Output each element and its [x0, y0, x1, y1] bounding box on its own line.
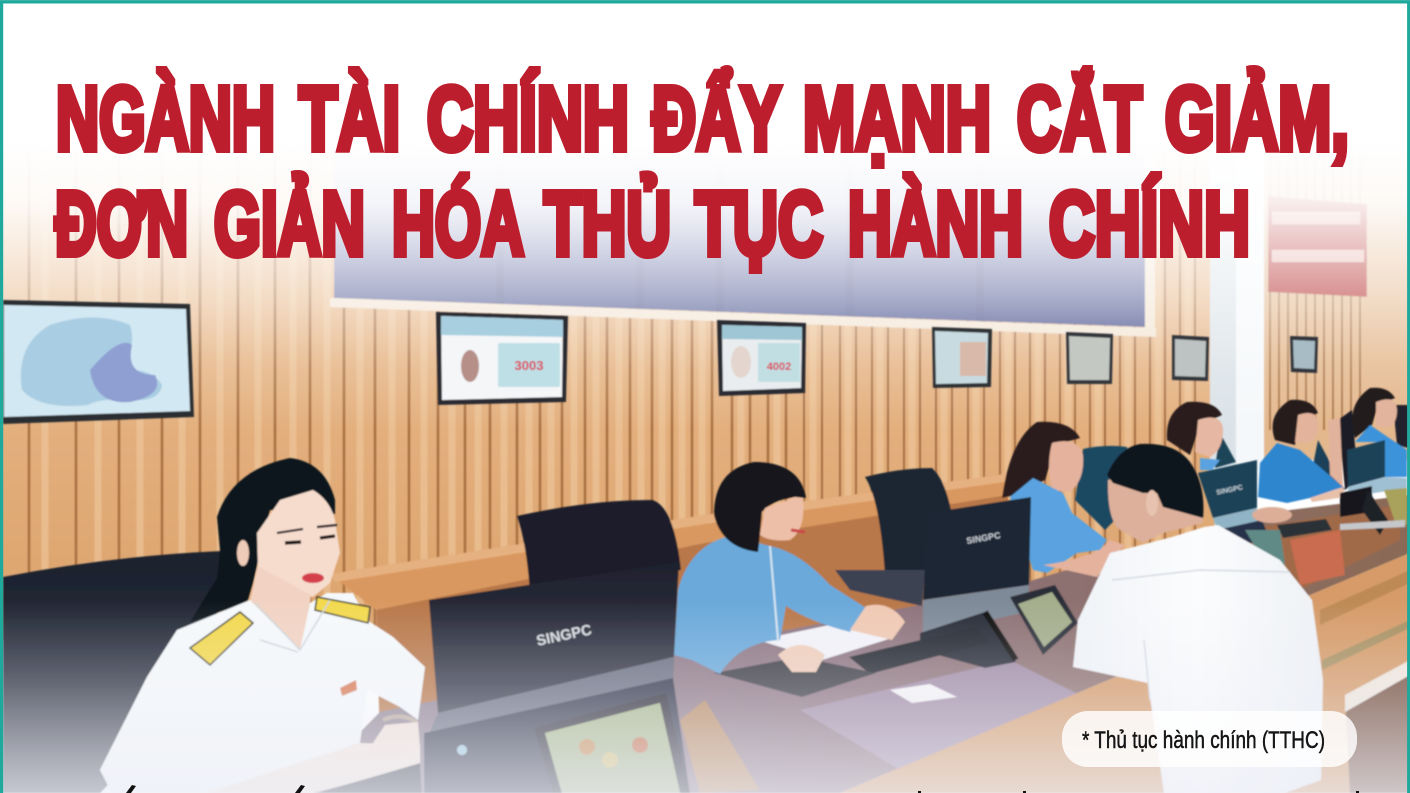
title: TỤC	[695, 174, 823, 274]
title: MẠNH	[803, 70, 991, 170]
wall monitor 5	[1172, 335, 1209, 381]
title: TÀI	[299, 68, 400, 170]
monitor centre: SINGPC	[966, 530, 1002, 546]
title	[55, 68, 1349, 274]
monitor teal: SINGPC	[1216, 484, 1244, 497]
tablet centre	[1010, 585, 1078, 655]
chair back 3	[835, 468, 951, 606]
desk wooden front	[840, 553, 1410, 793]
chair back 2	[517, 500, 681, 592]
title: ĐƠN	[55, 174, 188, 274]
wall monitor 3	[932, 327, 992, 388]
glass desk surface	[300, 495, 1410, 793]
woman 3 blue shirt	[1002, 422, 1125, 577]
right wall section	[1263, 120, 1410, 460]
top white fade	[0, 0, 1410, 430]
wall monitor 4	[1066, 332, 1113, 384]
wall monitor 2: 4002	[767, 361, 791, 373]
wall monitor 1	[436, 312, 568, 405]
monitor SINGPC: SINGPC	[535, 621, 593, 650]
keyboard far	[1277, 519, 1332, 538]
red sign	[1268, 196, 1367, 297]
chair back 4	[1075, 446, 1135, 530]
man in white shirt	[1073, 444, 1323, 793]
wall TV left	[3, 300, 194, 424]
title: CHÍNH	[427, 68, 629, 170]
visitor chair right	[1345, 660, 1410, 793]
papers	[758, 619, 957, 703]
title: GIẢN	[214, 172, 365, 274]
woman 2 blue shirt	[674, 462, 905, 674]
wall monitor 1: 3003	[515, 358, 543, 373]
far chairs	[1215, 405, 1408, 490]
wood wall	[0, 120, 1215, 640]
title: NGÀNH	[56, 68, 275, 170]
white pillar	[1210, 150, 1264, 470]
title: THỦ	[544, 172, 671, 274]
monitor far right	[1340, 440, 1407, 535]
cut-off next-line accents	[126, 785, 1359, 793]
title: HÓA	[392, 174, 524, 274]
keyboards	[714, 627, 990, 697]
monitor teal	[1198, 460, 1285, 565]
woman 1 in uniform	[100, 458, 425, 793]
wall monitor 6	[1290, 336, 1318, 373]
bottom pale fade	[0, 600, 1410, 793]
tablet left	[534, 693, 690, 793]
photo background: walls	[0, 120, 1410, 640]
title: HÀNH	[848, 174, 1023, 274]
monitor centre	[920, 497, 1031, 668]
desk reflections	[680, 505, 1400, 793]
hand woman 5	[1252, 507, 1292, 523]
woman 4	[1167, 402, 1223, 470]
footnote pill: * Thủ tục hành chính (TTHC)	[1082, 727, 1325, 754]
title: ĐẨY	[652, 68, 781, 170]
footnote pill	[1062, 711, 1357, 767]
wall monitor 2	[717, 320, 806, 396]
photo foreground: counter, staff, equipment	[3, 300, 1410, 793]
wood counter ledge	[330, 474, 1010, 740]
woman 5 blue shirt	[1258, 400, 1345, 503]
woman 6 blue shirt	[1352, 388, 1407, 477]
large display wall	[330, 150, 1156, 337]
title: CẮT	[1017, 68, 1142, 170]
big chair left	[3, 551, 222, 793]
monitor SINGPC	[424, 562, 690, 793]
title: CHÍNH	[1049, 174, 1250, 274]
